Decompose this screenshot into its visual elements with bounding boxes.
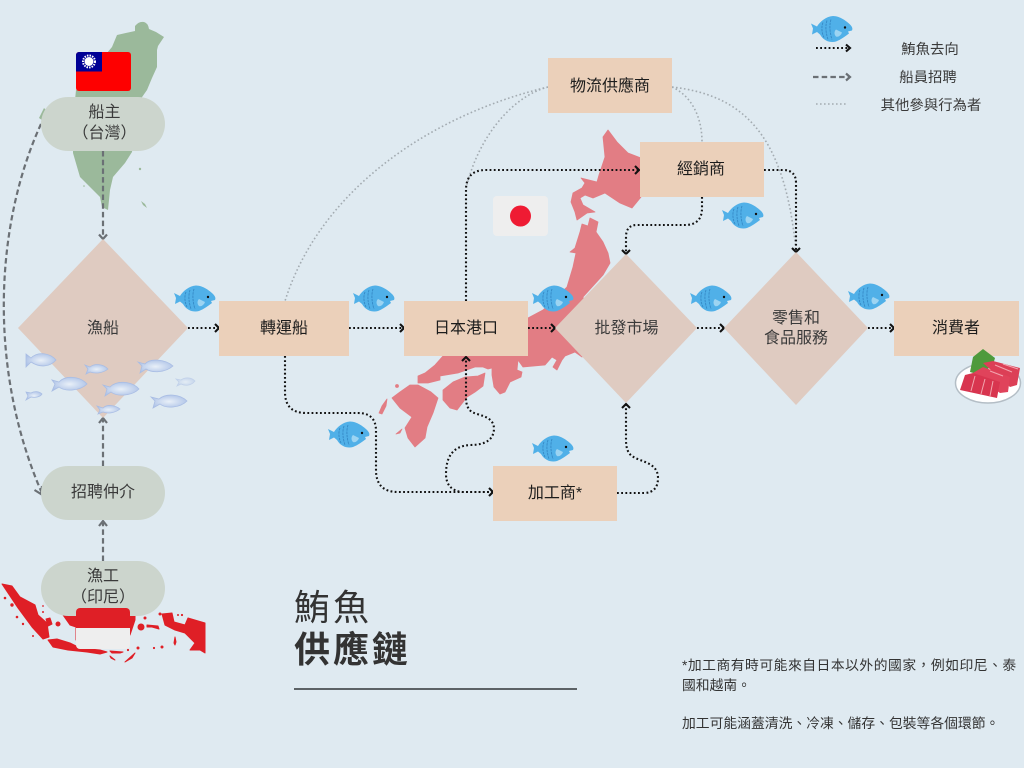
icon: fish after transshipment <box>353 286 394 312</box>
flag: taiwan <box>76 52 131 91</box>
box: japan port: 日本港口 <box>434 319 498 337</box>
pill: vessel owner: （台灣） <box>72 124 137 142</box>
footnote <box>682 657 1017 731</box>
box: distributor <box>640 142 764 197</box>
pill: recruitment agent <box>41 466 165 520</box>
pill: fish workers: （印尼） <box>71 588 135 606</box>
title: 供應鏈 <box>294 629 411 670</box>
icon: fish after boat <box>174 286 215 312</box>
diamond: wholesale market <box>555 254 697 403</box>
arrow: processor to wholesale <box>617 404 658 493</box>
box: logistics provider <box>548 58 672 113</box>
arrow: retail to consumer <box>868 324 894 332</box>
box: transshipment vessel <box>219 301 349 356</box>
arrow: distributor to wholesale <box>622 197 702 254</box>
box: logistics provider: 物流供應商 <box>570 76 650 95</box>
fish school <box>26 354 195 414</box>
legend <box>811 16 981 114</box>
arrow: processor to port <box>446 357 494 492</box>
arrow: boat to transshipment <box>188 324 219 332</box>
map: taiwan <box>39 22 164 210</box>
diamond: fishing boat: 漁船 <box>87 319 119 337</box>
title <box>294 587 411 670</box>
arrow: port to distributor <box>466 166 639 301</box>
diamond: fishing boat <box>18 239 188 418</box>
arrow: distributor to retail <box>764 170 800 252</box>
arrow: port to wholesale <box>528 324 555 332</box>
legend tuna flow <box>816 41 959 58</box>
diamond: retail and food service: 零售和 <box>772 309 820 327</box>
legend crew recruitment: 船員招聘 <box>899 69 957 86</box>
pill: vessel owner <box>41 97 165 151</box>
diamond: retail and food service <box>724 252 868 405</box>
box: consumer <box>894 301 1019 356</box>
legend fish icon <box>811 16 852 42</box>
icon: fish after wholesale <box>690 286 731 312</box>
icon: fish after retail <box>848 284 889 310</box>
arrow: transshipment to processor <box>285 356 493 496</box>
footnote: *加工商有時可能來自日本以外的國家，例如印尼、泰 <box>682 657 1017 673</box>
icon: fish at processor <box>532 436 573 462</box>
pill: vessel owner: 船主 <box>88 103 121 121</box>
icon: fish at distributor <box>722 202 763 229</box>
icon: fish after port <box>532 286 573 312</box>
legend other actors: 其他參與行為者 <box>881 97 981 114</box>
box: japan port <box>404 301 528 356</box>
pill: recruitment agent: 招聘仲介 <box>71 483 135 501</box>
other actors links <box>285 87 796 301</box>
pill: fish workers: 漁工 <box>87 567 119 585</box>
icon: tuna sashimi plate <box>956 349 1020 403</box>
legend crew recruitment <box>813 69 957 86</box>
diamond: wholesale market: 批發市場 <box>594 319 659 337</box>
box: processor <box>493 466 617 521</box>
arrow: transshipment to port <box>349 324 404 332</box>
flag: japan <box>493 196 548 236</box>
box: transshipment vessel: 轉運船 <box>260 319 308 337</box>
icon: fish on transshipment route <box>328 422 369 448</box>
title: 鮪魚 <box>294 587 372 628</box>
arrow: crew to agent <box>99 521 107 561</box>
diamond: retail and food service: 食品服務 <box>764 329 828 347</box>
footnote: 加工可能涵蓋清洗、冷凍、儲存、包裝等各個環節。 <box>682 715 999 731</box>
arrow: wholesale to retail <box>697 324 724 332</box>
pill: fish workers <box>41 561 165 616</box>
arrow: agent to fishing boat <box>99 418 107 466</box>
box: processor: 加工商* <box>528 484 582 502</box>
legend tuna flow: 鮪魚去向 <box>901 41 959 58</box>
flag: indonesia <box>76 608 130 649</box>
box: consumer: 消費者 <box>932 319 980 337</box>
map: indonesia <box>2 584 205 662</box>
box: distributor: 經銷商 <box>677 160 725 178</box>
arrow: owner to recruitment agent <box>4 124 42 494</box>
arrow: owner to fishing boat <box>99 151 107 239</box>
footnote: 國和越南。 <box>682 678 751 693</box>
map: japan <box>379 130 641 447</box>
